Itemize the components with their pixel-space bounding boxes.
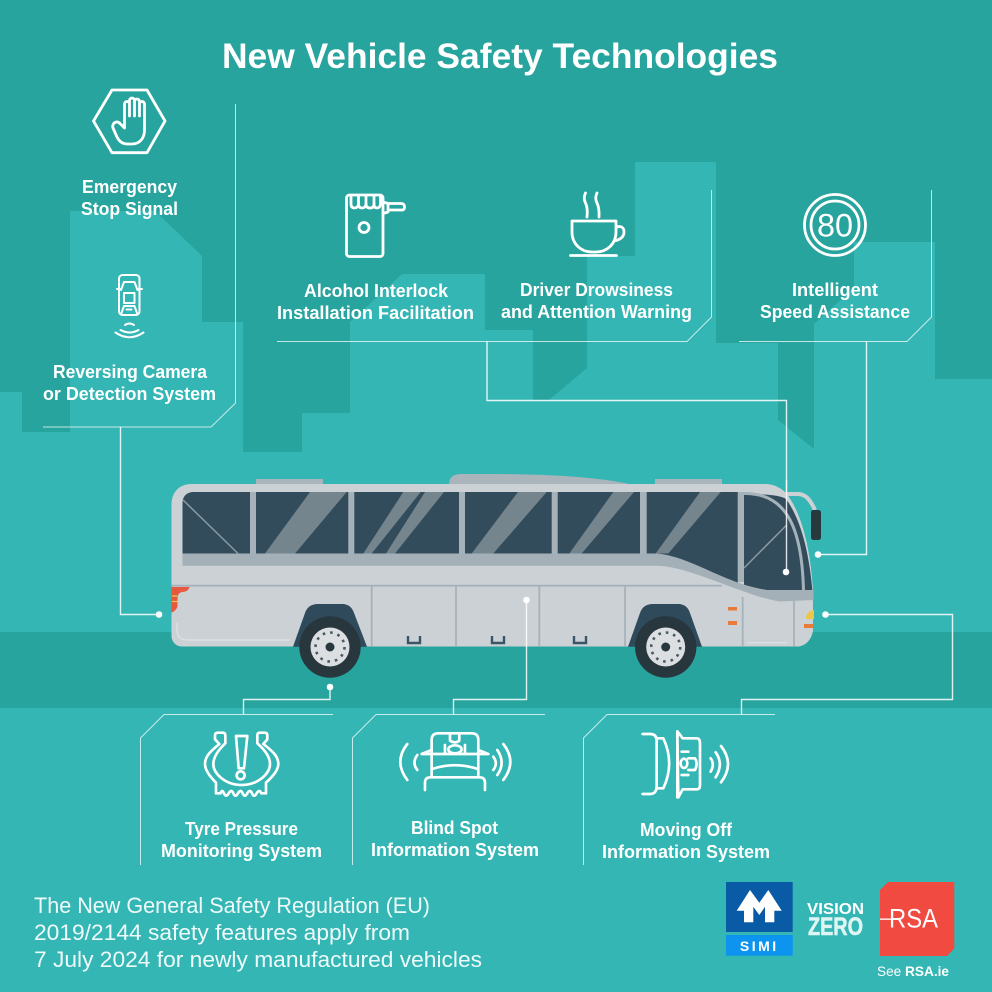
label <box>277 281 474 323</box>
label: Monitoring System <box>161 841 322 861</box>
label: or Detection System <box>43 384 216 404</box>
label: Driver Drowsiness <box>520 280 673 300</box>
panel lines <box>172 586 794 646</box>
connector line over windscreen <box>786 480 788 572</box>
windows <box>182 492 812 600</box>
icon: 80 speed sign <box>804 194 866 256</box>
label <box>760 280 910 322</box>
label: Speed Assistance <box>760 302 910 322</box>
label: Moving Off <box>640 820 733 840</box>
connector end: windscreen dot <box>783 569 789 575</box>
feature: reversing camera <box>43 275 216 404</box>
mirror <box>784 494 821 540</box>
label: Stop Signal <box>81 199 178 219</box>
bottom bracket: blind spot <box>352 714 545 865</box>
background: road band <box>0 632 992 708</box>
feature: blind spot <box>371 733 539 860</box>
rear light <box>172 587 190 612</box>
title: New Vehicle Safety Technologies <box>222 37 778 76</box>
icon: breathalyser <box>346 195 404 256</box>
bus body <box>172 484 813 646</box>
footer note <box>34 893 482 972</box>
rear wheel <box>293 604 367 678</box>
luggage handles <box>408 636 586 643</box>
label: Installation Facilitation <box>277 303 474 323</box>
logo: SIMI: SIMI <box>740 938 779 954</box>
label <box>371 818 539 860</box>
label: and Attention Warning <box>501 302 692 322</box>
front wheel <box>628 604 702 678</box>
label: Information System <box>602 842 770 862</box>
label: Tyre Pressure <box>185 819 298 839</box>
roof units <box>256 474 722 485</box>
website note: See RSA.ie <box>877 963 949 979</box>
label <box>602 820 770 862</box>
connector: blind spot <box>454 597 530 714</box>
label <box>161 819 322 861</box>
logo: RSA <box>880 882 954 956</box>
connector dot: front markers over bus <box>822 611 829 618</box>
bus <box>172 474 821 678</box>
label <box>501 280 692 322</box>
icon: 80 speed sign: 80 <box>817 208 853 244</box>
connector: moving off <box>742 614 952 714</box>
icon: hand in hexagon <box>94 90 165 153</box>
icon: truck with sensor waves <box>400 733 510 790</box>
label <box>43 362 216 404</box>
icon: truck side with waves <box>643 731 728 797</box>
window sill band <box>182 554 814 602</box>
label: Blind Spot <box>411 818 498 838</box>
icon: car with sensor waves <box>116 275 144 337</box>
label: Information System <box>371 840 539 860</box>
lower body cover <box>172 565 813 646</box>
label: Intelligent <box>792 280 878 300</box>
connector lines: top right group <box>739 190 932 558</box>
front lights <box>728 607 814 628</box>
logo: Vision Zero: ZERO <box>808 913 863 941</box>
logo: Vision Zero: VISION <box>807 901 864 918</box>
bottom bracket: tyre pressure <box>140 714 333 865</box>
footer note: The New General Safety Regulation (EU) <box>34 893 430 918</box>
label: Emergency <box>82 177 177 197</box>
logo: Vision Zero <box>807 901 864 941</box>
label: Reversing Camera <box>53 362 208 382</box>
footer note: 7 July 2024 for newly manufactured vehicles <box>34 947 482 972</box>
feature: driver drowsiness <box>501 193 692 322</box>
connector lines: top middle group <box>277 190 786 572</box>
footer note: 2019/2144 safety features apply from <box>34 920 410 945</box>
feature: emergency stop signal <box>81 90 178 219</box>
feature: alcohol interlock <box>277 195 474 323</box>
connector lines: top left group <box>43 104 236 618</box>
feature: intelligent speed assistance <box>760 194 910 322</box>
icon: tyre warning <box>205 733 278 796</box>
feature: moving off <box>602 731 770 862</box>
label: Alcohol Interlock <box>304 281 449 301</box>
connector: tyre pressure <box>244 684 333 714</box>
label <box>81 177 178 219</box>
highlights <box>177 623 787 643</box>
icon: coffee cup <box>570 193 624 256</box>
bottom bracket: moving off <box>584 714 775 865</box>
feature: tyre pressure <box>161 733 322 861</box>
logo: SIMI <box>726 882 793 956</box>
logo: RSA: RSA <box>889 904 938 934</box>
